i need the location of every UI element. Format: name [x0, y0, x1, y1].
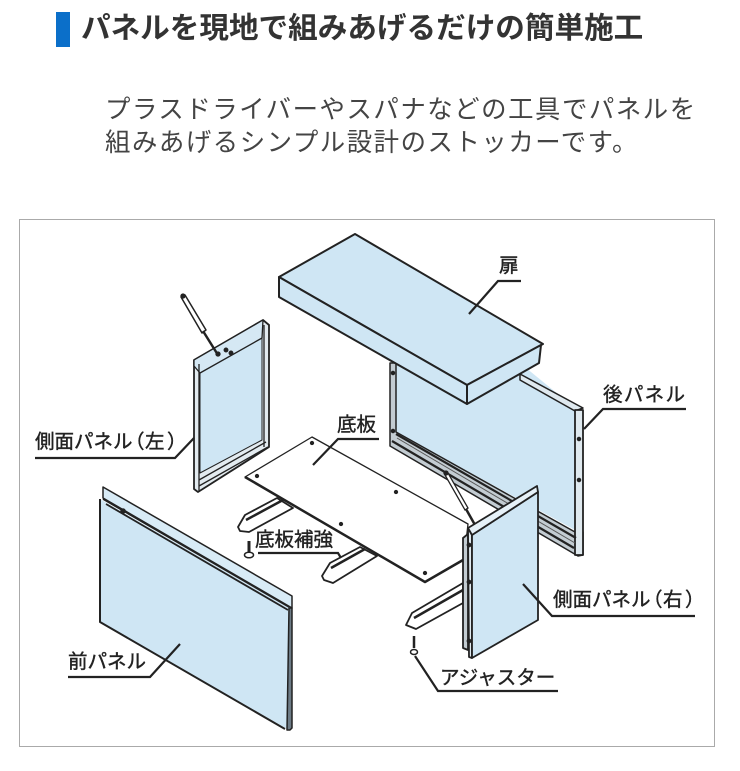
diagram frame	[20, 220, 714, 746]
label: bottom board: 底板	[337, 414, 376, 436]
label: front panel	[68, 644, 180, 677]
label: bottom reinforcement	[255, 529, 341, 558]
label: door: 扉	[499, 255, 519, 277]
label: left side panel: 側面パネル（左）	[35, 431, 187, 453]
heading accent bar	[56, 12, 70, 47]
label: bottom board	[313, 414, 379, 465]
body text: プラスドライバーやスパナなどの工具でパネルを	[105, 96, 697, 124]
part: bottom board	[245, 437, 468, 582]
body text	[105, 96, 697, 157]
label: bottom reinforcement: 底板補強	[255, 529, 334, 551]
part: back panel	[390, 363, 583, 556]
label: back panel: 後パネル	[603, 384, 685, 406]
part: right side damper	[444, 471, 475, 525]
part: right side panel	[463, 486, 538, 658]
label: back panel	[584, 384, 686, 429]
label: right side panel	[523, 584, 705, 616]
part: bottom reinforcement	[238, 498, 463, 629]
part: front panel	[100, 487, 292, 730]
part: left side panel with damper	[181, 294, 269, 492]
label: adjuster	[415, 656, 558, 691]
adjuster bolts	[244, 541, 418, 654]
label: adjuster: アジャスター	[440, 667, 555, 689]
body text: 組みあげるシンプル設計のストッカーです。	[105, 129, 639, 157]
label: front panel: 前パネル	[68, 651, 146, 673]
part: door	[279, 234, 543, 404]
title: パネルを現地で組みあげるだけの簡単施工	[81, 12, 643, 45]
label: door	[469, 255, 521, 314]
label: right side panel: 側面パネル（右）	[553, 589, 705, 611]
